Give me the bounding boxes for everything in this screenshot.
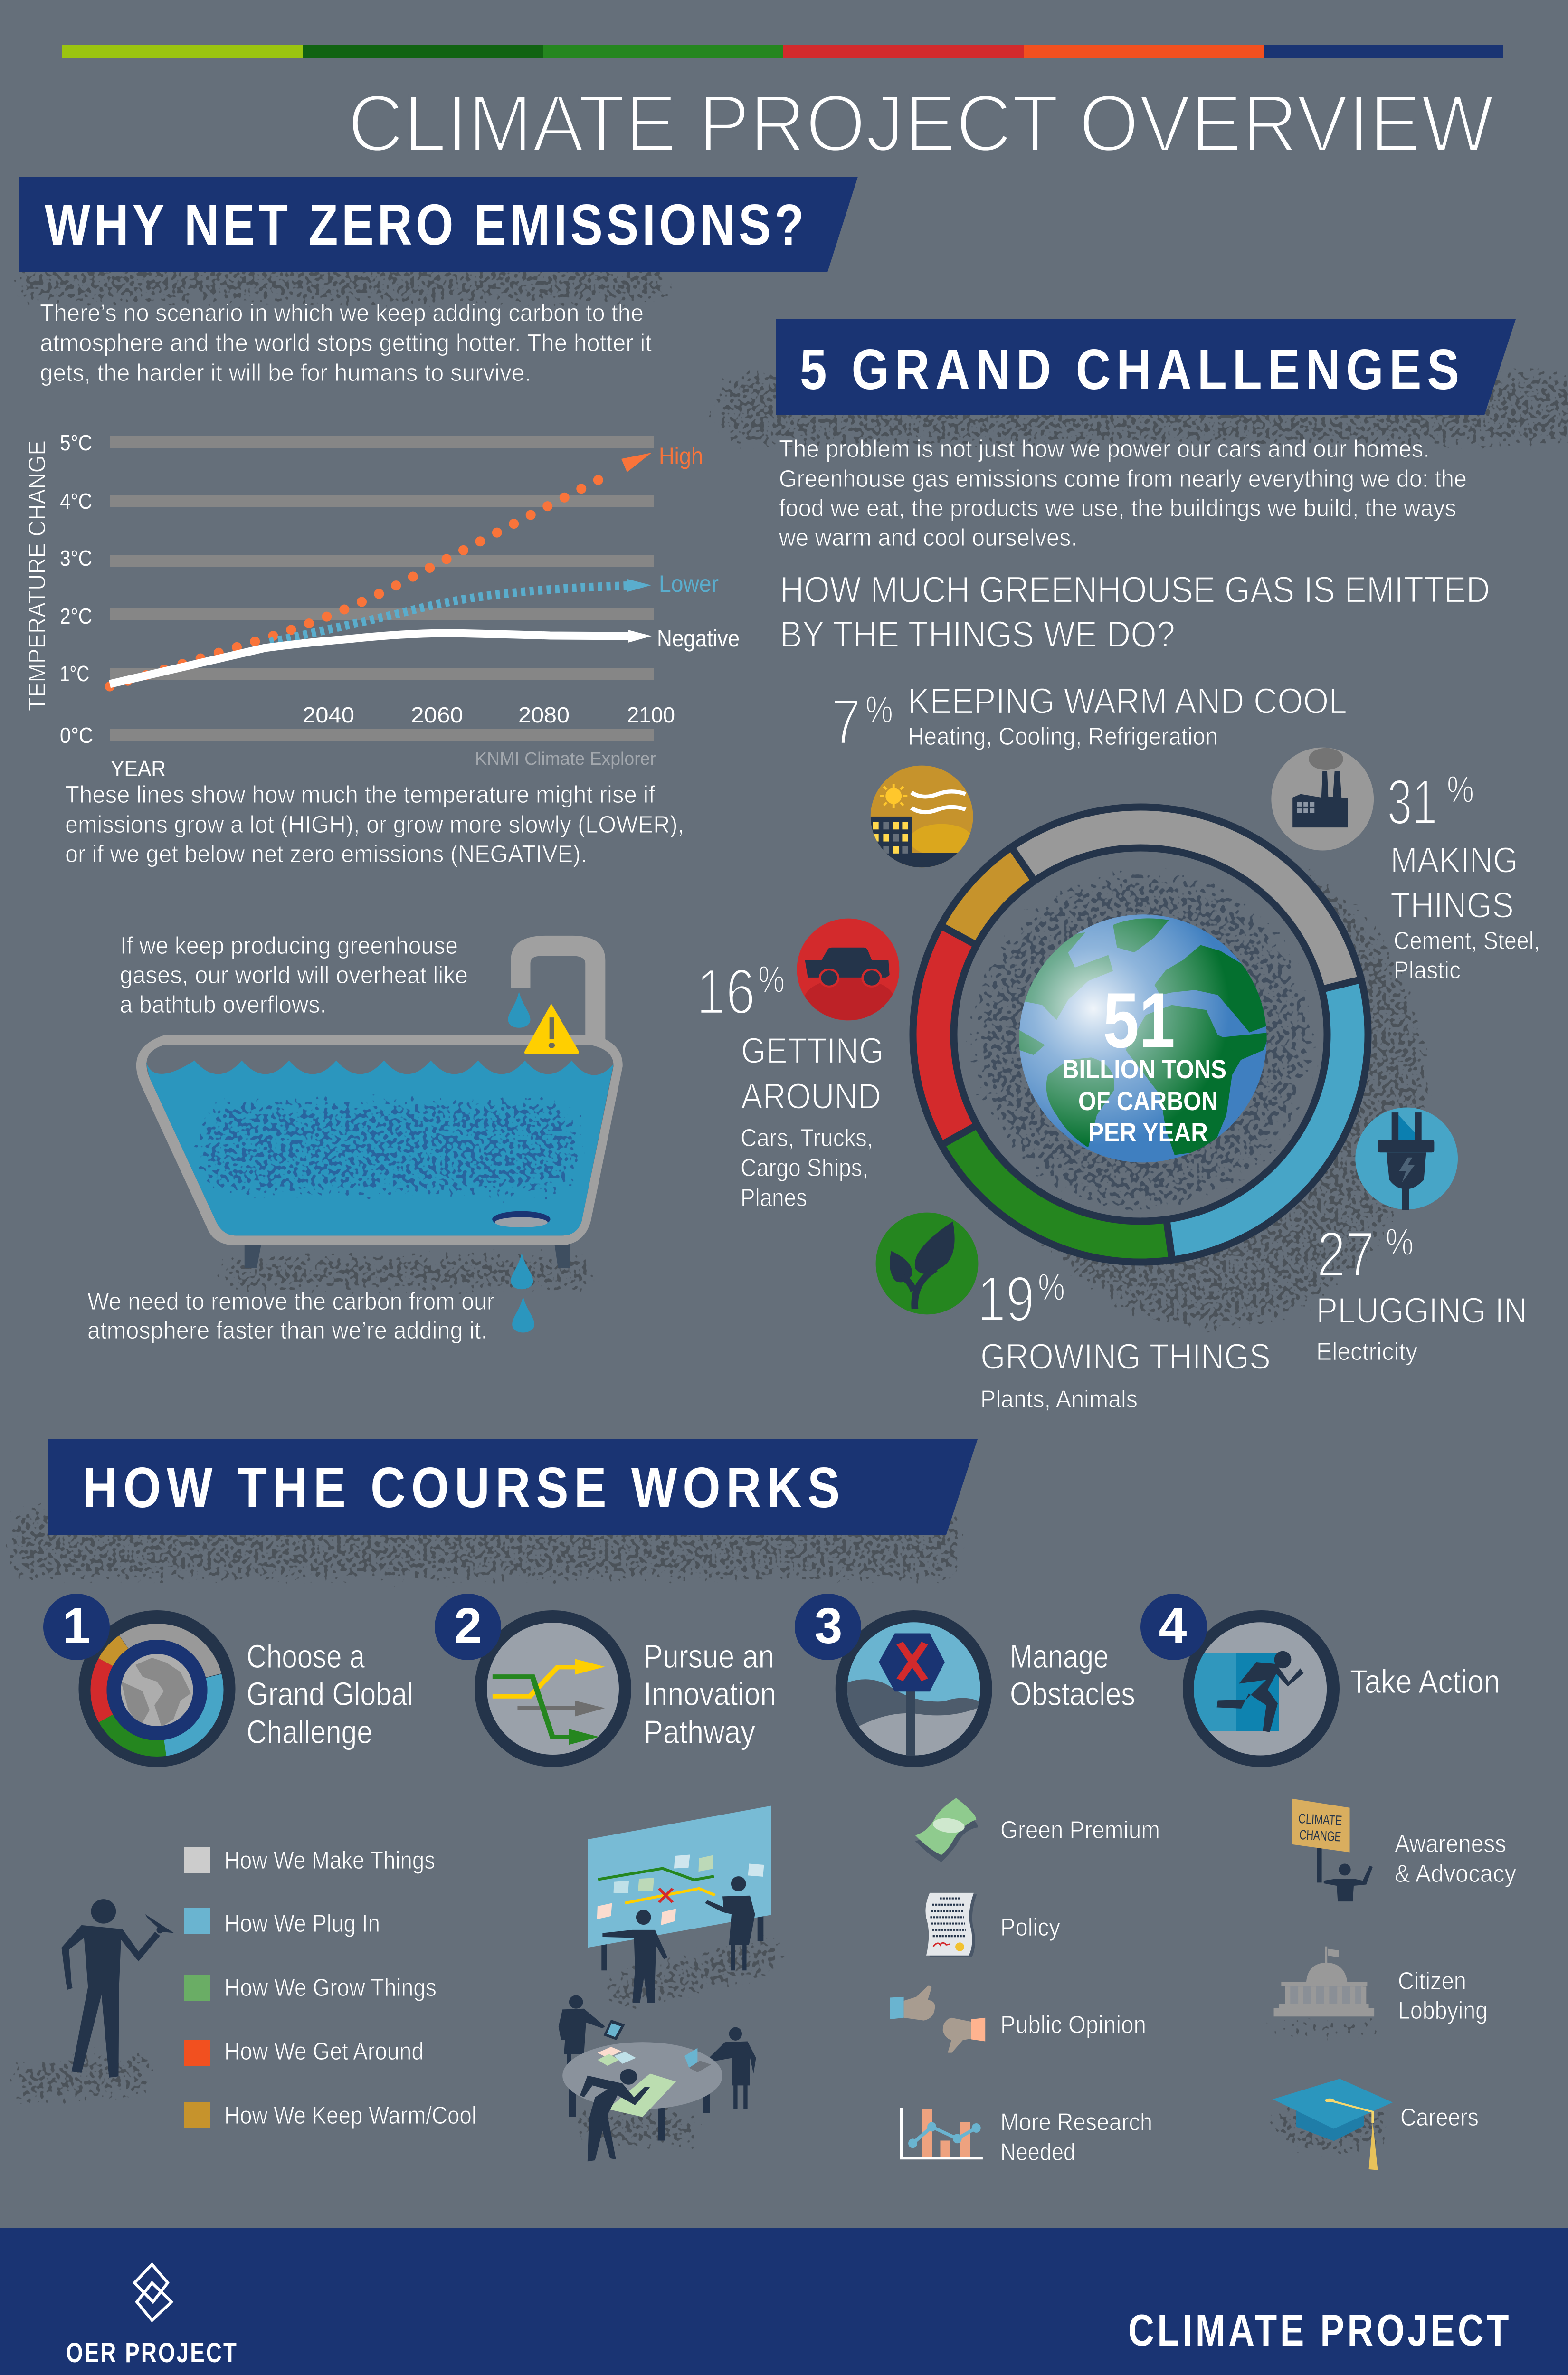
tub removal text (87, 1288, 494, 1344)
icon: making things factory (1271, 748, 1374, 851)
list: obstacles: Green Premium (1000, 1816, 1160, 1844)
label: making things 31%: 31 (1387, 766, 1437, 838)
label: getting around 16% (696, 956, 884, 1212)
drain (492, 1211, 551, 1227)
label: getting around 16%: 16 (696, 956, 755, 1027)
line chart: temperature change: 2°C (60, 604, 92, 628)
label: growing things 19% (977, 1263, 1271, 1413)
step 1: choose a challenge (43, 1594, 413, 1771)
icon: faucet (511, 936, 605, 1039)
chart explanation text: These lines show how much the temperature might rise if (65, 781, 656, 808)
list: actions: Citizen (1398, 1967, 1466, 1995)
icon: research chart (901, 2108, 983, 2158)
label: keeping warm and cool 7% (831, 681, 1347, 758)
tub removal text: atmosphere faster than we’re adding it. (87, 1317, 487, 1344)
label: making things 31%: THINGS (1390, 885, 1514, 926)
illustration: overflowing bathtub (136, 936, 623, 1332)
list: obstacles: Needed (1000, 2138, 1075, 2166)
section header: why net zero (19, 177, 858, 272)
negative scenario line (110, 625, 740, 684)
label: making things 31%: Cement, Steel, (1394, 927, 1540, 955)
lower scenario line: Lower (659, 570, 719, 597)
challenges intro text: The problem is not just how we power our cars and our homes. (779, 435, 1430, 462)
step 4: take action (1140, 1594, 1500, 1767)
challenges intro text (779, 435, 1467, 551)
water drops (508, 991, 534, 1332)
intro text: There’s no scenario in which we keep adding carbon to the (40, 299, 644, 326)
legend: challenge colours: How We Grow Things (224, 1974, 437, 2002)
line chart: temperature change: 2060 (411, 703, 463, 727)
illustration: person with pen (5, 1899, 174, 2110)
globe (1019, 914, 1270, 1162)
label: keeping warm and cool 7%: % (865, 688, 893, 731)
question heading: HOW MUCH GREENHOUSE GAS IS EMITTED (780, 569, 1490, 610)
legend: challenge colours: How We Make Things (224, 1847, 435, 1874)
icon: climate change protest sign: CLIMATE (1298, 1811, 1342, 1829)
label: plugging in 27%: PLUGGING IN (1316, 1291, 1527, 1331)
list: obstacles (890, 1798, 1160, 2166)
step 3: manage obstacles: 3 (815, 1598, 842, 1654)
step 2: pursue an innovation pathway: Innovation (644, 1675, 776, 1712)
label: keeping warm and cool 7%: 7 (831, 686, 861, 758)
line chart: temperature change: 0°C (60, 723, 93, 748)
high scenario line: High (659, 443, 703, 469)
challenges intro text: we warm and cool ourselves. (779, 524, 1077, 551)
step 2: pursue an innovation pathway: Pursue an (644, 1638, 774, 1675)
icon: capitol building (1264, 1947, 1387, 2040)
line chart: temperature change: TEMPERATURE CHANGE (24, 440, 50, 711)
label: getting around 16%: Cargo Ships, (741, 1154, 868, 1182)
icon: policy document (925, 1893, 977, 1957)
line chart: temperature change: 2080 (518, 703, 570, 727)
step 2: pursue an innovation pathway (435, 1594, 776, 1767)
warning sign (524, 1004, 579, 1054)
stipple texture behind section headers (2, 256, 1568, 1586)
chart explanation text (65, 781, 684, 867)
icon: climate change protest sign: CHANGE (1299, 1827, 1341, 1845)
label: making things 31% (1387, 766, 1540, 984)
label: growing things 19%: GROWING THINGS (980, 1337, 1271, 1377)
icon: climate change protest sign (1292, 1799, 1373, 1901)
step 3: manage obstacles: Manage (1010, 1638, 1109, 1675)
bathtub overflow text: If we keep producing greenhouse (120, 932, 458, 959)
list: obstacles: More Research (1000, 2109, 1152, 2136)
label: getting around 16%: Cars, Trucks, (741, 1124, 873, 1152)
bathtub overflow text: gases, our world will overheat like (120, 961, 468, 988)
challenges intro text: food we eat, the products we use, the buildings we build, the ways (779, 494, 1456, 522)
donut centre label: OF CARBON (1078, 1086, 1218, 1116)
label: making things 31%: % (1447, 768, 1474, 810)
icon: growing things leaf (876, 1213, 978, 1314)
line chart: temperature change: YEAR (111, 756, 166, 781)
section header: how the course works: HOW THE COURSE WORKS (83, 1456, 846, 1520)
label: keeping warm and cool 7%: KEEPING WARM AND COOL (908, 681, 1347, 722)
donut centre label (1062, 977, 1226, 1147)
board (588, 1806, 771, 1970)
question heading (780, 569, 1490, 655)
label: growing things 19%: 19 (977, 1263, 1035, 1335)
panel: 5 grand challenges (696, 319, 1540, 1413)
bathtub overflow text: a bathtub overflows. (120, 991, 326, 1018)
line chart: temperature change: 4°C (60, 489, 92, 513)
line chart: temperature change: 3°C (60, 546, 92, 570)
icon: plugging in (1355, 1108, 1458, 1210)
chart explanation text: or if we get below net zero emissions (NEGATIVE). (65, 840, 587, 867)
intro text (40, 299, 652, 386)
step 3: manage obstacles: Obstacles (1010, 1675, 1135, 1712)
top colour bar (62, 45, 1503, 58)
section header: why net zero: WHY NET ZERO EMISSIONS? (45, 192, 808, 257)
list: actions: Careers (1400, 2104, 1479, 2131)
tub body (136, 1036, 623, 1245)
legend: challenge colours: How We Get Around (224, 2038, 424, 2065)
step 4: take action: 4 (1159, 1598, 1187, 1654)
bathtub overflow text (120, 932, 468, 1018)
OER Project wordmark: OER PROJECT (66, 2337, 238, 2368)
icon: keeping warm and cool (871, 766, 974, 871)
icon: public opinion thumbs (890, 1985, 985, 2053)
table (562, 2042, 722, 2117)
high scenario line (110, 443, 703, 686)
list: actions: Awareness (1395, 1830, 1506, 1858)
icon: OER Project logo (134, 2264, 171, 2320)
line chart: temperature change: 1°C (60, 661, 89, 686)
step 1: choose a challenge: Challenge (247, 1713, 372, 1750)
label: keeping warm and cool 7%: Heating, Cooling, Refrigeration (908, 723, 1218, 750)
line chart: temperature change: 2100 (627, 703, 675, 727)
negative scenario line: Negative (657, 625, 740, 652)
label: making things 31%: Plastic (1394, 957, 1461, 984)
legend: challenge colours: How We Keep Warm/Cool (224, 2102, 476, 2129)
donut centre label: PER YEAR (1088, 1117, 1208, 1147)
panel: how the course works (5, 1439, 1516, 2170)
list: actions: Lobbying (1398, 1997, 1488, 2024)
label: getting around 16%: GETTING (741, 1031, 884, 1071)
legend: challenge colours (184, 1847, 476, 2129)
step 1: choose a challenge: Choose a (247, 1638, 365, 1675)
line chart: temperature change: 5°C (60, 430, 92, 455)
icon: getting around car (797, 919, 899, 1020)
title: CLIMATE PROJECT OVERVIEW (348, 78, 1494, 169)
line chart: temperature change: KNMI Climate Explorer (475, 749, 656, 769)
step 3: manage obstacles (795, 1594, 1135, 1767)
intro text: atmosphere and the world stops getting hotter. The hotter it (40, 329, 652, 356)
list: actions: & Advocacy (1395, 1860, 1516, 1888)
label: growing things 19%: Plants, Animals (980, 1386, 1138, 1413)
donut centre label: 51 (1103, 977, 1175, 1064)
illustration: team at board and table (559, 1806, 792, 2161)
water (145, 1060, 614, 1235)
section header: 5 grand challenges: 5 GRAND CHALLENGES (800, 338, 1465, 401)
icon: tub legs (245, 1244, 570, 1268)
label: growing things 19%: % (1038, 1266, 1065, 1308)
chart explanation text: emissions grow a lot (HIGH), or grow more slowly (LOWER), (65, 811, 684, 838)
label: plugging in 27%: 27 (1317, 1218, 1375, 1290)
step 1: choose a challenge: Grand Global (247, 1675, 413, 1712)
step 2: pursue an innovation pathway: Pathway (644, 1713, 755, 1750)
legend: challenge colours: How We Plug In (224, 1910, 380, 1938)
section header: how the course works (48, 1439, 978, 1535)
list: obstacles: Policy (1000, 1914, 1060, 1941)
label: making things 31%: MAKING (1390, 840, 1518, 881)
line chart: temperature change (24, 430, 740, 781)
question heading: BY THE THINGS WE DO? (780, 613, 1175, 655)
challenges intro text: Greenhouse gas emissions come from nearly everything we do: the (779, 465, 1467, 492)
tub removal text: We need to remove the carbon from our (87, 1288, 494, 1315)
section header: 5 grand challenges (776, 319, 1516, 415)
label: getting around 16%: % (758, 958, 785, 1000)
step 2: pursue an innovation pathway: 2 (454, 1598, 482, 1654)
label: plugging in 27% (1316, 1218, 1527, 1366)
line chart: temperature change: 2040 (303, 703, 354, 727)
panel: why net zero emissions (19, 177, 858, 1344)
label: plugging in 27%: Electricity (1316, 1338, 1417, 1366)
step 4: take action: Take Action (1350, 1663, 1500, 1700)
label: getting around 16%: Planes (741, 1184, 807, 1212)
intro text: gets, the harder it will be for humans to survive. (40, 359, 531, 386)
step 1: choose a challenge: 1 (63, 1598, 90, 1654)
donut centre label: BILLION TONS (1062, 1054, 1226, 1084)
label: getting around 16%: AROUND (741, 1076, 881, 1117)
icon: graduation cap (1266, 2079, 1399, 2170)
icon: green premium money (915, 1798, 978, 1862)
list: actions (1264, 1799, 1516, 2170)
footer band (0, 2228, 1568, 2375)
donut chart: emissions share (913, 807, 1433, 1335)
label: plugging in 27%: % (1386, 1221, 1414, 1263)
list: obstacles: Public Opinion (1000, 2011, 1146, 2039)
lower scenario line (270, 570, 719, 642)
